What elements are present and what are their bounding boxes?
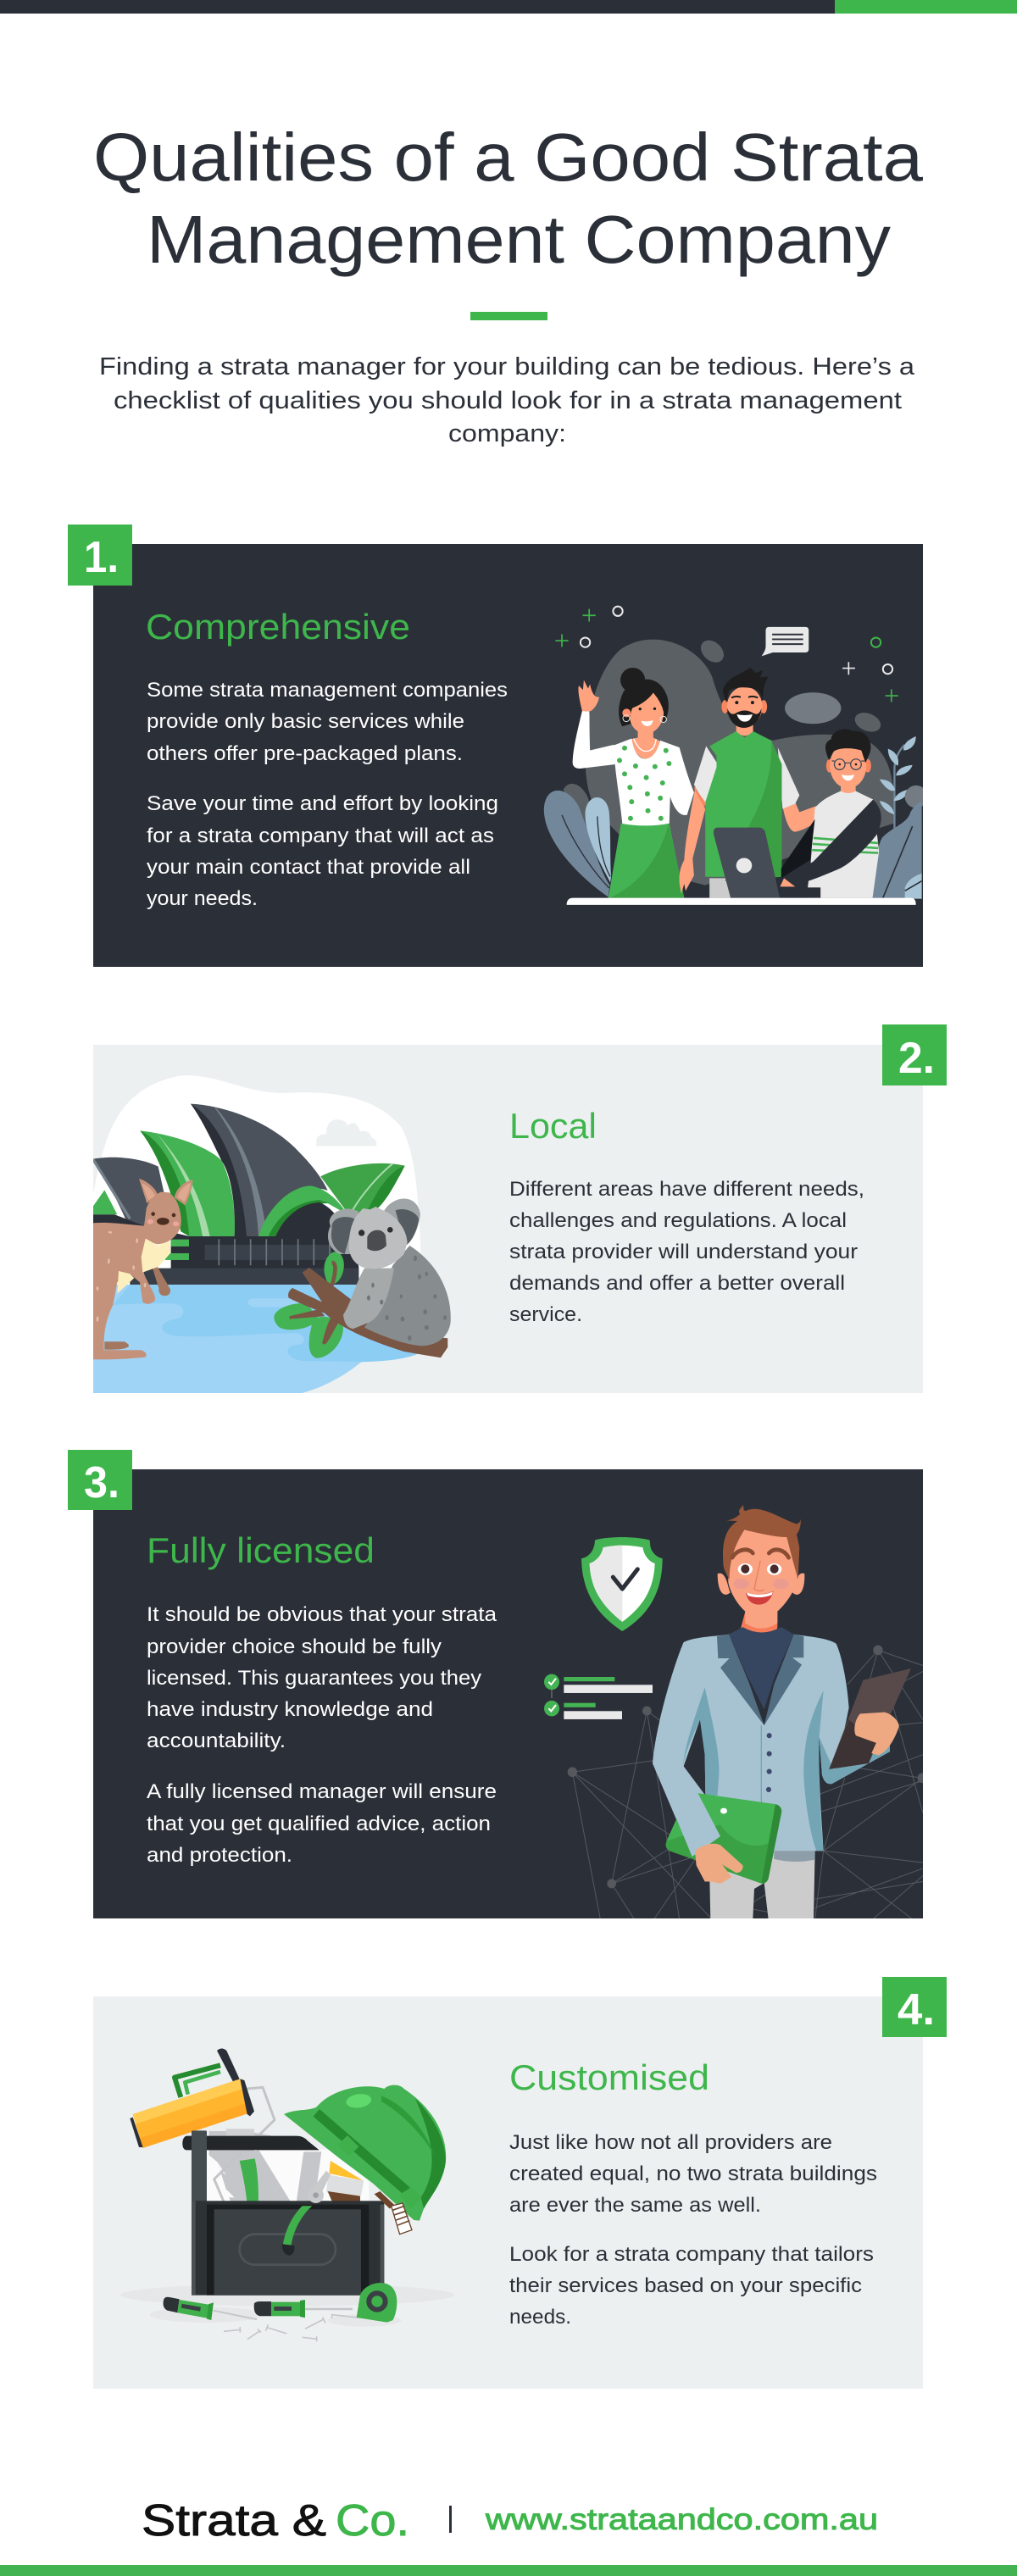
- body text: customised: created equal, no two strata buildings: [509, 2162, 877, 2185]
- body text: customised: Look for a strata company that tailors: [509, 2243, 874, 2266]
- top bar: [0, 0, 1017, 14]
- body text: customised: Just like how not all providers are: [509, 2131, 832, 2154]
- badge: 3: 3.: [84, 1458, 119, 1507]
- white background blob: [93, 1075, 421, 1288]
- background blobs: [586, 636, 894, 886]
- body text: local: strata provider will understand your: [509, 1241, 858, 1263]
- body text: customised: [509, 2131, 877, 2329]
- illustration: toolbox with tools and hard hat: [120, 2048, 455, 2341]
- shield with check: [581, 1537, 663, 1631]
- woman waving: [573, 668, 694, 898]
- screwdrivers: [164, 2297, 353, 2320]
- businessman: [653, 1505, 890, 1919]
- left foliage: [544, 784, 611, 897]
- body text: fully licensed: It should be obvious that your strata: [147, 1603, 497, 1626]
- illustration: manager with shield and checklist: [544, 1505, 927, 1919]
- body text: local: demands and offer a better overall: [509, 1272, 845, 1295]
- panel: 3 fully licensed: [68, 1450, 927, 1919]
- heading: Comprehensive: Comprehensive: [146, 607, 410, 647]
- body text: comprehensive: provide only basic services while: [147, 710, 464, 733]
- tape measure: [332, 2283, 397, 2323]
- saw: [209, 2087, 292, 2205]
- seated man with glasses: [780, 729, 881, 898]
- bottom bar: [0, 2565, 1017, 2576]
- panel: 2 local: [93, 1024, 947, 1393]
- body text: fully licensed: that you get qualified advice, action: [147, 1813, 491, 1835]
- body text: customised: their services based on your specific: [509, 2274, 862, 2297]
- opera house base: [130, 1236, 358, 1285]
- right foliage: [873, 736, 927, 899]
- heading: Customised: Customised: [509, 2057, 709, 2097]
- laptop: [714, 828, 820, 898]
- body text: comprehensive: [147, 679, 508, 910]
- pliers: [282, 2171, 331, 2256]
- nails: [224, 2318, 325, 2341]
- body text: local: [509, 1178, 864, 1326]
- title: [93, 119, 924, 277]
- body text: local: challenges and regulations. A local: [509, 1209, 847, 1232]
- body text: local: service.: [509, 1303, 582, 1326]
- body text: fully licensed: and protection.: [147, 1844, 292, 1867]
- body text: local: Different areas have different needs,: [509, 1178, 864, 1201]
- footer logo: Strata &: [142, 2496, 326, 2545]
- badge: 2: 2.: [898, 1034, 935, 1083]
- koala on branch: [274, 1198, 451, 1358]
- box interior: [207, 2150, 369, 2205]
- badge: 1: [68, 525, 132, 586]
- body text: fully licensed: have industry knowledge and: [147, 1698, 433, 1721]
- kangaroo: [93, 1179, 193, 1359]
- toolbox: [182, 2130, 384, 2296]
- body text: comprehensive: others offer pre-packaged plans.: [147, 742, 463, 765]
- green folder and hand: [666, 1793, 781, 1884]
- heading: Local: Local: [509, 1106, 597, 1146]
- clipboard and hand: [829, 1668, 911, 1769]
- body text: fully licensed: licensed. This guarantees you they: [147, 1667, 481, 1690]
- illustration: three smiling colleagues: [544, 607, 927, 905]
- sparkles: [555, 607, 898, 702]
- desk: [567, 898, 916, 905]
- badge: 4: [882, 1977, 947, 2037]
- body text: comprehensive: your needs.: [147, 887, 258, 910]
- bearded man in green vest: [680, 668, 816, 898]
- body text: comprehensive: for a strata company that will act as: [147, 824, 494, 847]
- badge: 2: [882, 1024, 947, 1085]
- title accent bar: [470, 312, 547, 320]
- body text: customised: needs.: [509, 2306, 571, 2329]
- footer logo: [142, 2496, 409, 2545]
- green handle: [240, 2158, 258, 2205]
- water: [93, 1285, 420, 1393]
- badge: 4: 4.: [898, 1985, 935, 2035]
- illustration: Sydney Opera House with kangaroo and koala: [93, 1075, 451, 1393]
- panel: 4 customised: [93, 1977, 947, 2389]
- network nodes: [568, 1645, 927, 1888]
- hard hat: [284, 2085, 446, 2235]
- checklist: [544, 1674, 653, 1719]
- heading: Fully licensed: Fully licensed: [147, 1530, 375, 1570]
- body text: fully licensed: provider choice should be fully: [147, 1635, 442, 1658]
- body text: customised: are ever the same as well.: [509, 2194, 761, 2217]
- network lines: [572, 1650, 923, 1919]
- body text: fully licensed: [147, 1603, 497, 1867]
- title: Qualities of a Good Strata: [93, 119, 924, 195]
- body text: comprehensive: your main contact that provide all: [147, 856, 470, 879]
- badge: 3: [68, 1450, 132, 1510]
- footer divider: [449, 2506, 452, 2533]
- paint roller: [130, 2048, 254, 2148]
- body text: fully licensed: accountability.: [147, 1729, 286, 1752]
- panel: 1 comprehensive: [68, 525, 927, 967]
- cloud: [316, 1119, 376, 1146]
- ground shadows: [120, 2284, 455, 2327]
- ruler and paint brush: [296, 2151, 364, 2205]
- body text: comprehensive: Some strata management companies: [147, 679, 508, 702]
- intro text: Finding a strata manager for your building can be tedious. Here’s a: [99, 353, 915, 380]
- footer logo: Co.: [336, 2496, 409, 2545]
- title: Management Company: [147, 202, 891, 277]
- badge: 1: 1.: [84, 533, 119, 582]
- intro text: company:: [448, 420, 566, 447]
- footer website: www.strataandco.com.au: [485, 2503, 878, 2536]
- body text: fully licensed: A fully licensed manager will ensure: [147, 1780, 497, 1803]
- intro text: [99, 353, 915, 447]
- body text: comprehensive: Save your time and effort by looking: [147, 792, 498, 815]
- speech bubble: [762, 627, 809, 656]
- intro text: checklist of qualities you should look for in a strata management: [114, 387, 902, 414]
- opera house sails: [93, 1104, 405, 1236]
